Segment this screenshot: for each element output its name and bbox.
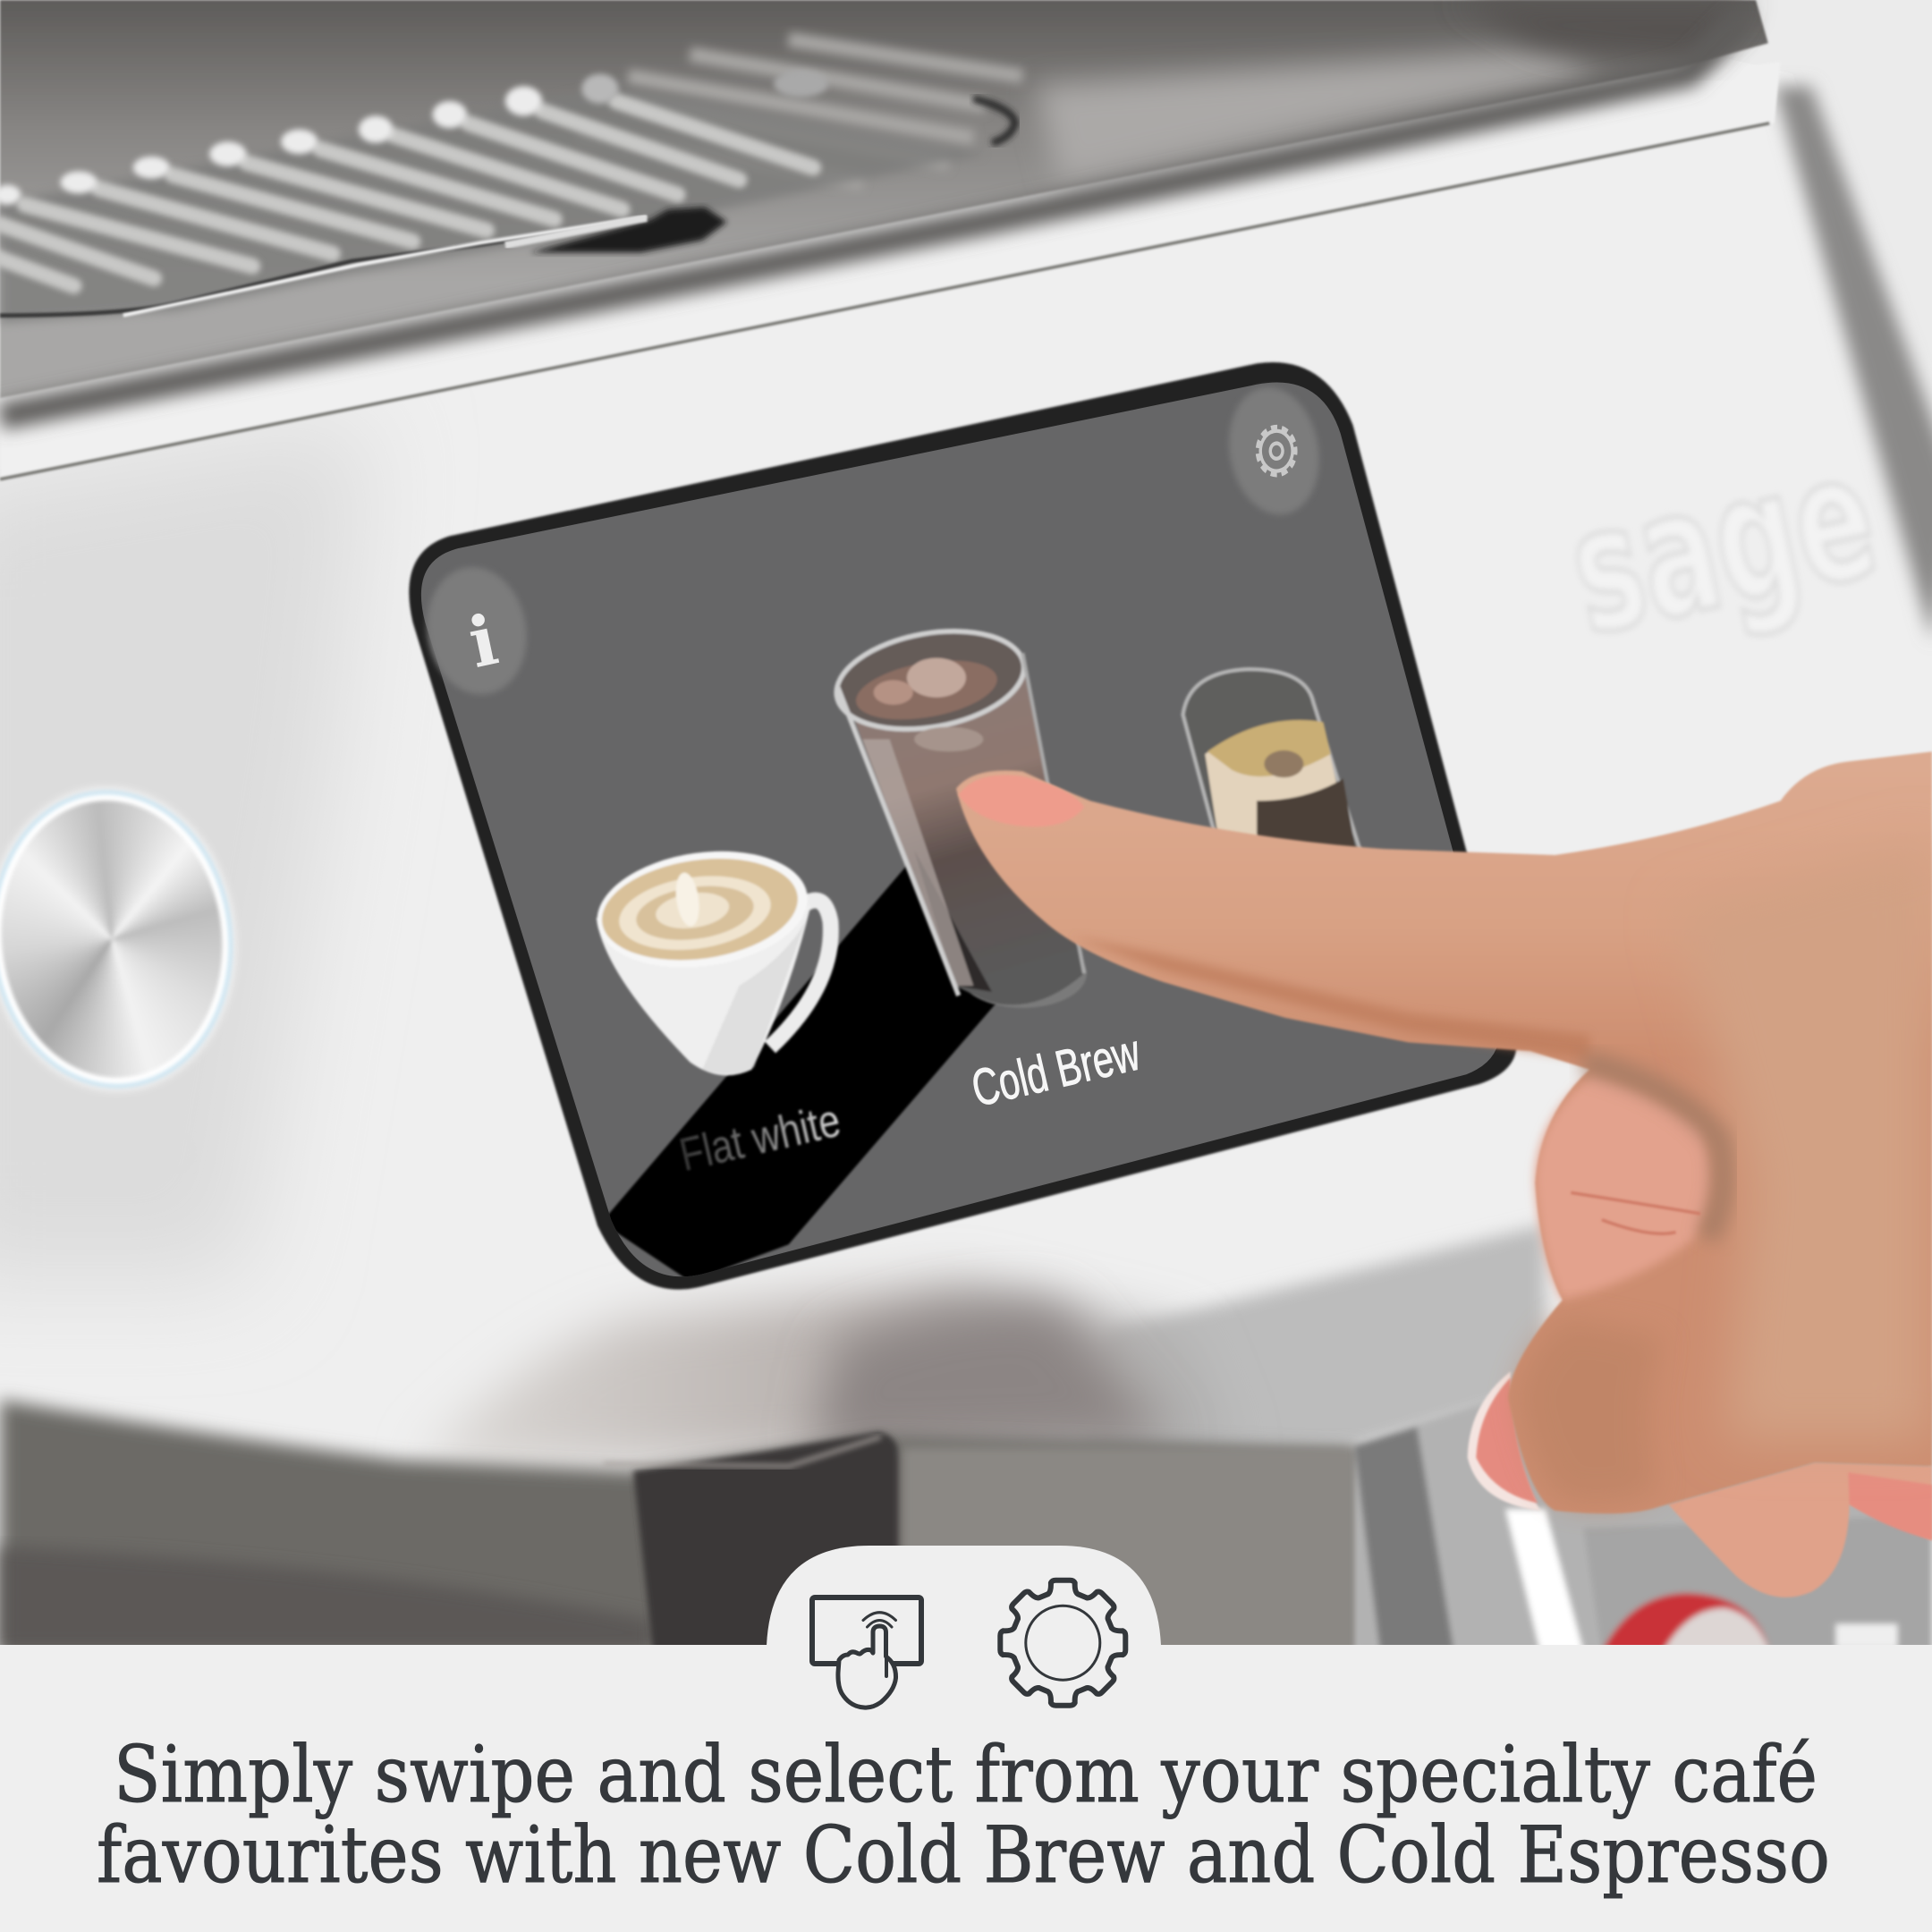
steel column and red knob <box>1354 1380 1932 1651</box>
machine base <box>0 1400 1355 1657</box>
cold brew glass <box>829 617 1087 1008</box>
base lower strip <box>0 1546 653 1651</box>
finger underside tone <box>1072 936 1589 1060</box>
screen reflection <box>604 862 1001 1282</box>
middle finger tone <box>1518 1318 1664 1504</box>
small status circle <box>157 1133 193 1171</box>
lower right body <box>1084 1224 1545 1454</box>
nail pink <box>1476 1377 1538 1504</box>
screen bezel <box>409 362 1517 1290</box>
icon: settings gear <box>1000 1580 1125 1706</box>
rim seam line <box>0 123 1769 479</box>
grille wire highlight <box>123 216 647 316</box>
back fingers <box>1668 1462 1932 1597</box>
tray corner shadow <box>1454 0 1750 62</box>
top rim highlight <box>0 62 1781 479</box>
grille well <box>0 86 986 323</box>
hand crease shadow <box>1583 1062 1723 1238</box>
silver shading left of screen <box>0 419 369 1282</box>
info button <box>417 559 537 702</box>
thumb crease lines <box>1571 1192 1700 1233</box>
base centre panel <box>902 1446 1358 1662</box>
settings button <box>1219 380 1329 521</box>
base seam highlight <box>604 1436 881 1466</box>
wire slot <box>530 207 727 252</box>
drip tray <box>0 0 1768 398</box>
fingernail <box>959 775 1084 826</box>
base dark box <box>633 1432 900 1651</box>
flat white cup <box>589 838 831 1075</box>
icon tab <box>767 1546 1161 1646</box>
cold espresso glass <box>1182 669 1364 862</box>
back of hand tone <box>1675 838 1932 1442</box>
grille dots <box>0 71 828 205</box>
body side strip <box>1775 86 1932 640</box>
right fingernail <box>1848 1472 1932 1540</box>
bottom caption panel <box>0 1645 1932 1932</box>
flat white label: Flat white <box>675 1095 845 1182</box>
tray shadow band <box>0 19 1743 417</box>
start button dial <box>0 790 236 1089</box>
drip tray slot end <box>973 98 1015 143</box>
lower centre reflection <box>813 1303 1171 1454</box>
wire end <box>505 218 647 245</box>
cold brew label: Cold Brew <box>967 1024 1145 1118</box>
thumb pad <box>1535 1074 1711 1300</box>
info button: i <box>462 600 504 684</box>
lower centre taupe shading <box>419 1282 1233 1466</box>
grille slats <box>0 101 813 286</box>
middle fingernail <box>1468 1371 1540 1511</box>
caption text <box>97 1729 1830 1901</box>
grille wire <box>0 221 640 316</box>
thumb and index base <box>956 751 1932 1513</box>
tray light patch <box>1035 49 1602 185</box>
icon: touch screen with finger <box>812 1597 921 1707</box>
tray ribs, right section <box>579 39 1022 182</box>
screen <box>421 382 1499 1276</box>
hand <box>956 751 1932 1597</box>
